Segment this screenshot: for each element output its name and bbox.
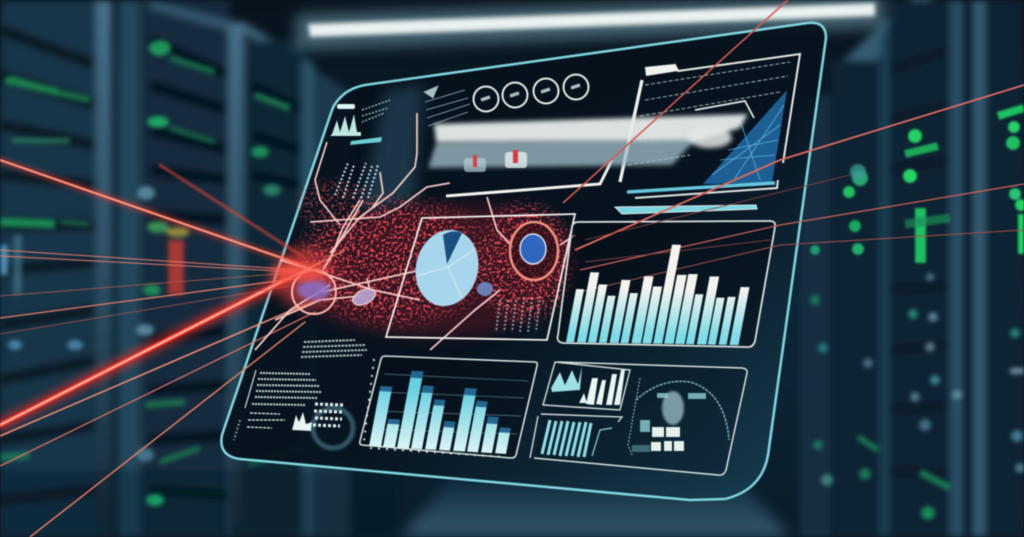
left laser beams behind panel edge: [0, 160, 320, 537]
small blue node: [477, 282, 493, 296]
pie chart: [408, 223, 486, 313]
rack LEDs, left: [0, 40, 300, 506]
purple node, centre: [350, 286, 378, 308]
purple node, left: [292, 270, 336, 314]
laser focal glow: [270, 250, 345, 281]
lower-left mini bars and table: [292, 404, 343, 431]
frosted white reflection bands across panel: [428, 114, 748, 168]
red data network cloud: [275, 175, 581, 337]
lower-right container frame: [534, 362, 747, 475]
white-red network traces: [255, 113, 575, 350]
gray dot columns inside pie frame: [496, 296, 540, 332]
widget: map lines and small icons: [424, 86, 470, 126]
small chart frame B stripes: [530, 414, 622, 458]
lower-left bar chart: [369, 369, 521, 454]
red network node with blue core: [510, 222, 558, 280]
icon pair: red status badges: [464, 150, 527, 172]
ceiling light: [296, 0, 885, 50]
lower-left bar chart frame: [360, 356, 537, 458]
widget: top-right window with area chart: [615, 54, 800, 214]
lower-left chart axes ticks: [364, 359, 505, 457]
large bar chart: [566, 243, 757, 345]
lower-left chart grid lines: [372, 374, 528, 434]
lower-left gauge ring: [313, 408, 353, 448]
pie chart frame: [386, 214, 575, 340]
small chart frame A: [543, 362, 630, 410]
dashboard glass panel: [221, 23, 826, 500]
icon row: four circular gauges: [474, 74, 588, 112]
top centre panel lower border: [446, 160, 612, 196]
server racks: right aisle: [800, 0, 1024, 537]
widget: top-left dot columns: [335, 163, 378, 198]
floor glow: [400, 480, 790, 537]
right-side red laser lines over frame: [563, 0, 1024, 292]
rack post seen through the glass: [360, 85, 425, 215]
widget: top-left mini chart: [330, 100, 390, 145]
rack LEDs, lower right (blurred): [810, 273, 1024, 520]
rack LEDs, right: [810, 108, 1024, 263]
lower-left text and table widgets: [234, 340, 367, 440]
large bar chart frame: [558, 221, 775, 347]
radial scatter dome chart: [628, 378, 729, 455]
server racks: left aisle: [0, 0, 400, 537]
